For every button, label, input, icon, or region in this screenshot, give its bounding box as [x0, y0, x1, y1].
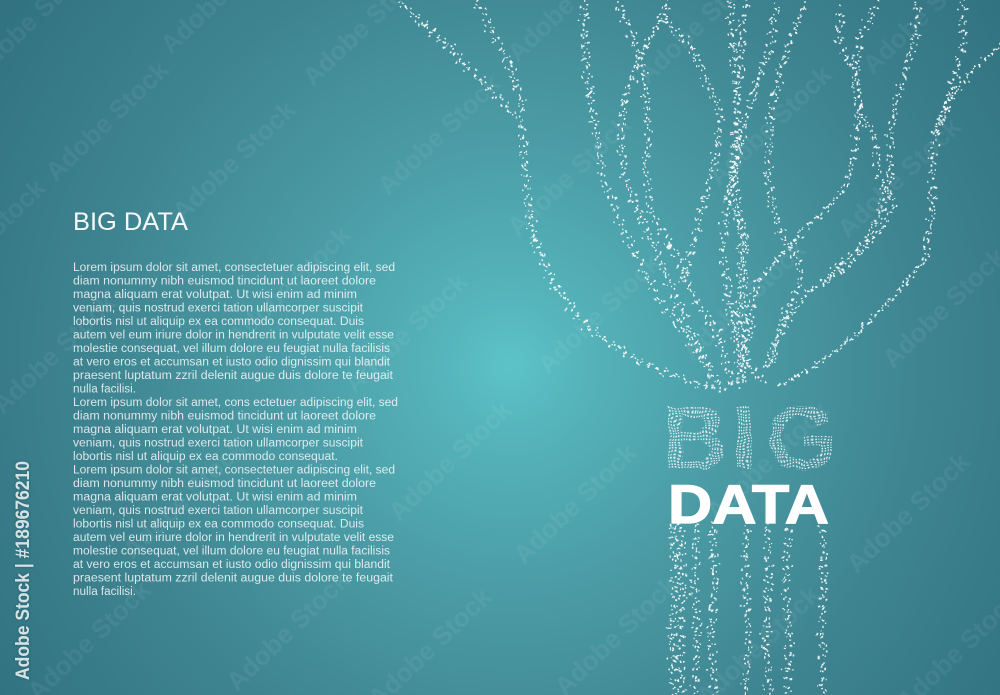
body text: at vero eros et accumsan et iusto odio dignissim qui blandit — [73, 356, 391, 368]
watermarks: Adobe Stock — [221, 219, 357, 352]
body text: lobortis nisl ut aliquip ex ea commodo consequat. Duis — [73, 316, 364, 328]
watermarks: Adobe Stock — [700, 394, 836, 527]
watermarks: Adobe Stock — [501, 109, 637, 242]
body text: veniam, quis nostrud exerci tation ullamcorper suscipit — [73, 302, 364, 314]
watermarks: Adobe Stock — [676, 234, 812, 367]
watermarks: Adobe Stock — [116, 432, 252, 565]
watermarks: Adobe Stock — [382, 394, 518, 527]
body text: nulla facilisi. — [73, 384, 136, 396]
body text: Lorem ipsum dolor sit amet, consectetuer adipiscing elit, sed — [73, 464, 395, 476]
body text: molestie consequat, vel illum dolore eu feugiat nulla facilisis — [73, 546, 390, 558]
body text: magna aliquam erat volutpat. Ut wisi enim ad minim — [73, 289, 357, 301]
watermarks: Adobe Stock — [840, 446, 976, 579]
heading: BIG DATA — [73, 208, 188, 236]
body text: at vero eros et accumsan et iusto odio dignissim qui blandit — [73, 559, 391, 571]
body text: Lorem ipsum dolor sit amet, consectetuer adipiscing elit, sed — [73, 262, 395, 274]
body text: praesent luptatum zzril delenit augue duis dolore te feugait — [73, 370, 394, 382]
body text: veniam, quis nostrud exerci tation ullamcorper suscipit — [73, 505, 364, 517]
dotted word BIG: BIG — [662, 388, 837, 489]
body text: magna aliquam erat volutpat. Ut wisi enim ad minim — [73, 424, 357, 436]
watermarks: Adobe Stock — [371, 68, 507, 201]
watermarks: Adobe Stock — [702, 59, 838, 192]
watermarks: Adobe Stock — [338, 266, 474, 399]
body text: diam nonummy nibh euismod tincidunt ut laoreet dolore — [73, 410, 376, 422]
solid word DATA: DATA — [668, 473, 829, 535]
body text: autem vel eum iriure dolor in hendrerit in vulputate velit esse — [73, 532, 394, 544]
body text: diam nonummy nibh euismod tincidunt ut laoreet dolore — [73, 478, 376, 490]
body text: Lorem ipsum dolor sit amet, cons ectetuer adipiscing elit, sed — [73, 397, 398, 409]
watermarks: Adobe Stock — [507, 437, 643, 570]
vertical stock credit: Adobe Stock | #189676210 — [13, 461, 34, 680]
body text: autem vel eum iriure dolor in hendrerit in vulputate velit esse — [73, 330, 394, 342]
body text: diam nonummy nibh euismod tincidunt ut laoreet dolore — [73, 276, 376, 288]
body text: veniam, quis nostrud exerci tation ullamcorper suscipit — [73, 438, 364, 450]
watermarks: Adobe Stock — [531, 247, 667, 380]
watermarks: Adobe Stock — [166, 94, 302, 227]
watermarks: Adobe Stock — [39, 54, 175, 187]
watermarks: Adobe Stock — [831, 111, 967, 244]
body text: lobortis nisl ut aliquip ex ea commodo consequat. — [73, 451, 338, 463]
body text: molestie consequat, vel illum dolore eu feugiat nulla facilisis — [73, 343, 390, 355]
body text — [73, 262, 398, 598]
body text: praesent luptatum zzril delenit augue duis dolore te feugait — [73, 572, 394, 584]
particle strands — [397, 0, 1000, 695]
watermarks: Adobe Stock — [220, 564, 356, 695]
body text: magna aliquam erat volutpat. Ut wisi enim ad minim — [73, 492, 357, 504]
body text: nulla facilisi. — [73, 586, 136, 598]
body text: lobortis nisl ut aliquip ex ea commodo consequat. Duis — [73, 518, 364, 530]
